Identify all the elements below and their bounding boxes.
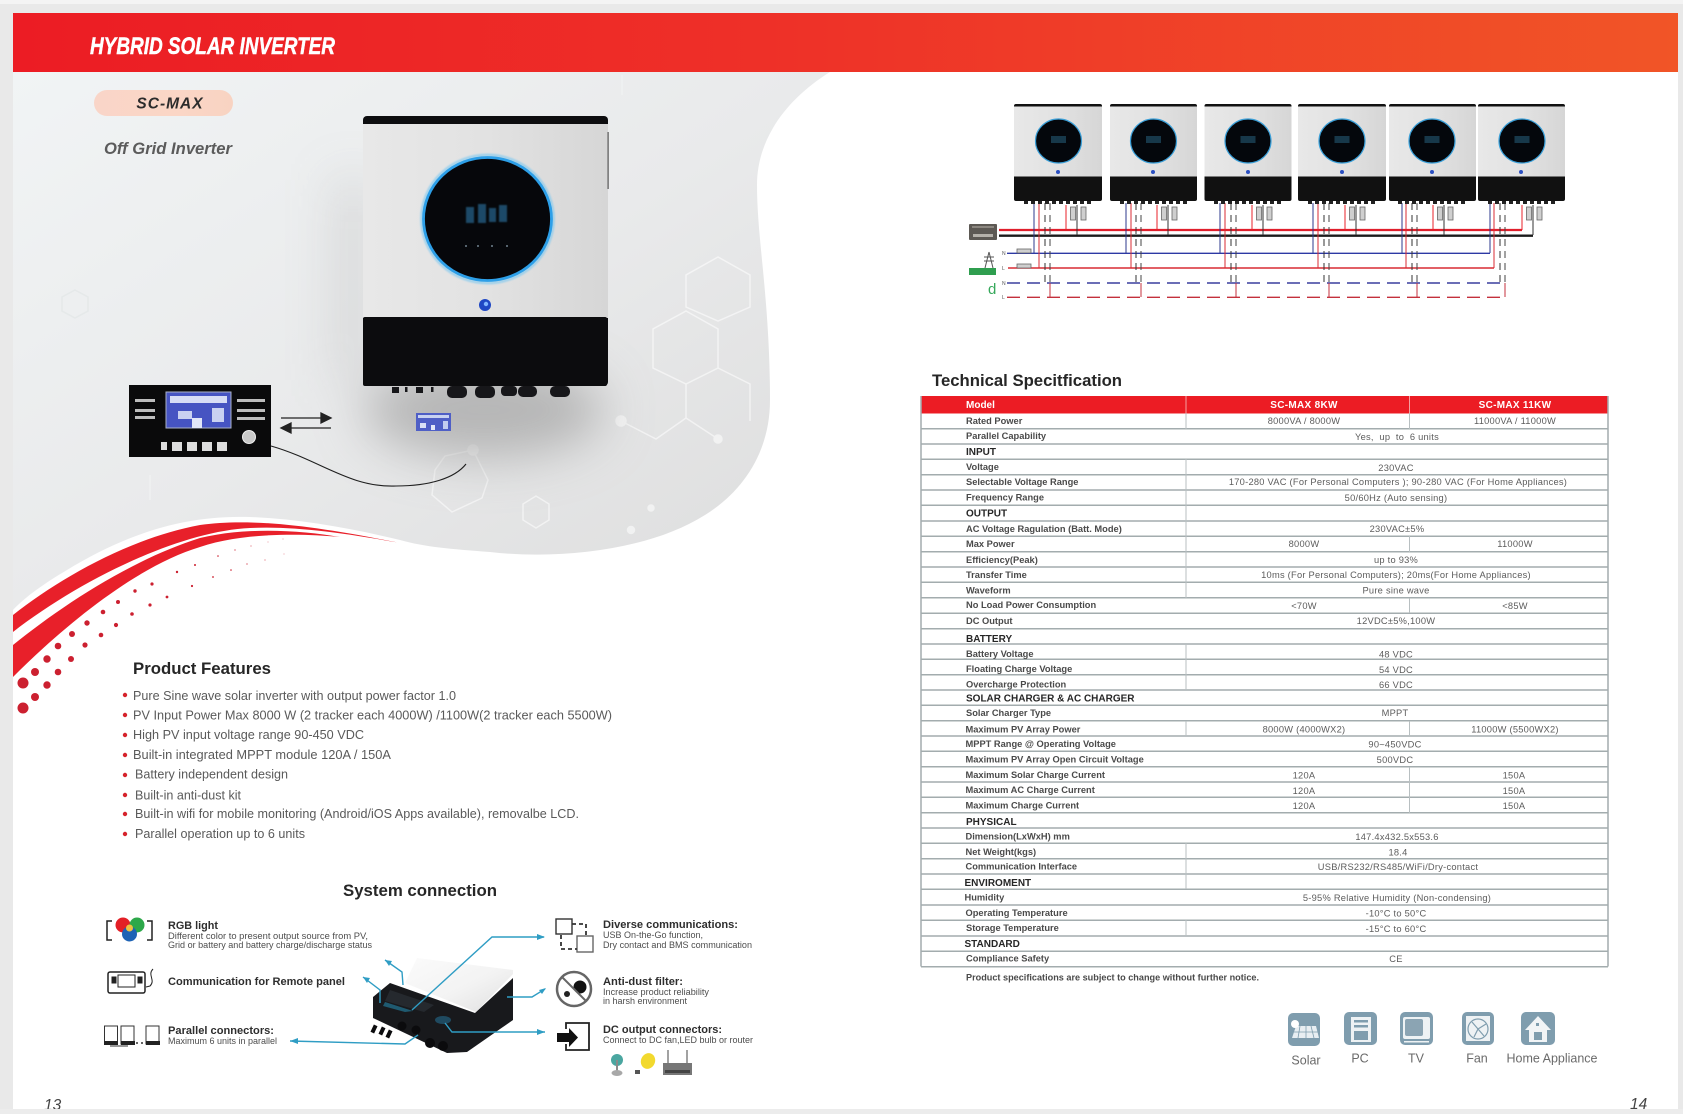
output rows: up to 93% xyxy=(1374,555,1418,565)
icon: DC output xyxy=(557,1023,589,1050)
battery rows: Battery Voltage xyxy=(966,649,1034,659)
application labels: Solar xyxy=(1291,1054,1321,1068)
red dots xyxy=(18,539,284,714)
output rows: 10ms (For Personal Computers); 20ms(For Home Appliances) xyxy=(1261,570,1531,580)
table header: SC-MAX 11KW xyxy=(1479,400,1552,411)
model badge: SC-MAX xyxy=(136,96,204,112)
output rows: <70W xyxy=(1291,601,1317,611)
bottom page edge xyxy=(0,1109,1683,1114)
solar charger rows: Maximum AC Charge Current xyxy=(966,785,1095,795)
battery rows: Floating Charge Voltage xyxy=(966,664,1072,674)
input rows: 230VAC xyxy=(1378,463,1414,473)
red swoosh xyxy=(13,522,400,677)
callout: anti-dust filter: in harsh environment xyxy=(603,996,688,1006)
callout: diverse communications: Diverse communications: xyxy=(603,919,738,931)
icon: solar xyxy=(1288,1013,1320,1046)
environment rows: ENVIROMENT xyxy=(964,878,1031,889)
solar charger rows: MPPT xyxy=(1382,708,1408,718)
callout: remote panel xyxy=(108,969,345,993)
inverter 2 xyxy=(1110,104,1197,202)
bus labels xyxy=(1002,251,1006,301)
input rows: Frequency Range xyxy=(966,492,1044,502)
inverter 1 xyxy=(1014,104,1102,202)
battery rows: 66 VDC xyxy=(1379,680,1413,690)
system diagram inverter xyxy=(370,958,513,1053)
output rows: 230VAC±5% xyxy=(1370,524,1424,534)
application labels: Fan xyxy=(1466,1052,1488,1066)
icon: anti-dust xyxy=(557,972,591,1006)
callout: diverse communications: USB On-the-Go function, xyxy=(603,930,703,940)
callout: RGB light xyxy=(107,918,373,950)
solar charger rows: SOLAR CHARGER & AC CHARGER xyxy=(966,694,1135,704)
breakers xyxy=(1017,207,1542,268)
solar charger rows: MPPT Range @ Operating Voltage xyxy=(966,739,1116,749)
output rows: 8000W xyxy=(1289,539,1319,549)
callout: RGB light: Grid or battery and battery charge/discharge status xyxy=(168,940,373,950)
general rows: Rated Power xyxy=(966,416,1023,426)
callout: DC output connectors: Connect to DC fan,LED bulb or router xyxy=(603,1035,753,1045)
solar charger rows: 150A xyxy=(1503,786,1526,796)
environment rows: 5-95% Relative Humidity (Non-condensing) xyxy=(1303,893,1491,903)
solar charger rows: Solar Charger Type xyxy=(966,708,1051,718)
solar charger rows: 11000W (5500WX2) xyxy=(1471,724,1559,734)
output rows: No Load Power Consumption xyxy=(966,600,1096,610)
environment rows: Humidity xyxy=(964,892,1005,902)
callout: DC output connectors xyxy=(557,1023,753,1076)
bus labels: L xyxy=(1002,295,1005,301)
icon: communications xyxy=(556,919,593,952)
solar charger rows: Maximum Solar Charge Current xyxy=(966,770,1105,780)
icon: fan, bulb, router xyxy=(611,1050,692,1076)
physical rows: 18.4 xyxy=(1388,848,1408,858)
output rows: 12VDC±5%,100W xyxy=(1357,616,1435,626)
feature list: Built-in wifi for mobile monitoring (Android/iOS Apps available), removalbe LCD. xyxy=(135,806,579,821)
general rows: Parallel Capability xyxy=(966,431,1047,441)
application labels: TV xyxy=(1408,1052,1425,1066)
feature list: Parallel operation up to 6 units xyxy=(135,826,305,841)
output rows: Waveform xyxy=(966,586,1011,596)
callout: remote panel: Communication for Remote panel xyxy=(168,976,345,988)
output rows: 11000W xyxy=(1497,539,1533,549)
inverter shadow xyxy=(338,180,604,458)
application labels xyxy=(1291,1052,1598,1068)
output rows: Max Power xyxy=(966,539,1015,549)
bus labels: L xyxy=(1002,266,1005,272)
callout: anti-dust filter xyxy=(557,972,710,1006)
remote LCD panel xyxy=(129,385,271,457)
bus labels: N xyxy=(1002,251,1006,257)
solar charger rows: 120A xyxy=(1293,801,1316,811)
icon: fan xyxy=(1462,1012,1494,1045)
icon: home xyxy=(1521,1012,1555,1045)
icon: remote panel xyxy=(108,969,153,993)
input rows xyxy=(966,447,1567,503)
label d: d xyxy=(988,281,996,298)
general rows xyxy=(966,416,1556,442)
callout: RGB light: Different color to present output source from PV, xyxy=(168,931,368,941)
bus labels: N xyxy=(1002,281,1006,287)
title: HYBRID SOLAR INVERTER xyxy=(90,33,336,60)
icon: PC xyxy=(1344,1012,1377,1045)
output rows: Efficiency(Peak) xyxy=(966,555,1038,565)
inverter 3 xyxy=(1204,104,1292,202)
solar charger rows: 90~450VDC xyxy=(1368,740,1422,750)
environment rows: -10°C to 50°C xyxy=(1366,908,1426,918)
technical specification heading: Technical Specitfication xyxy=(932,372,1122,390)
header banner xyxy=(13,13,1678,72)
feature list: Battery independent design xyxy=(135,766,288,782)
specification table xyxy=(921,396,1608,967)
output rows: DC Output xyxy=(966,616,1012,626)
callout: RGB light: RGB light xyxy=(168,920,218,932)
output rows xyxy=(966,508,1533,626)
input rows: 170-280 VAC (For Personal Computers ); 90-280 VAC (For Home Appliances) xyxy=(1229,477,1567,487)
environment rows: -15°C to 60°C xyxy=(1366,924,1426,934)
output rows: <85W xyxy=(1502,601,1528,611)
solar charger rows: 150A xyxy=(1503,801,1526,811)
callout: diverse communications: Dry contact and BMS communication xyxy=(603,940,752,950)
solar charger rows xyxy=(966,694,1559,811)
solar charger rows: 500VDC xyxy=(1377,755,1413,765)
solar charger rows: Maximum Charge Current xyxy=(966,800,1079,810)
system connection heading: System connection xyxy=(343,882,497,900)
table header: SC-MAX 8KW xyxy=(1270,400,1338,411)
application icons xyxy=(1288,1012,1598,1068)
solar charger rows: 120A xyxy=(1293,770,1316,780)
output rows: OUTPUT xyxy=(966,508,1007,520)
icon: battery xyxy=(969,224,997,240)
callout: DC output connectors: DC output connectors: xyxy=(603,1024,722,1036)
page number 13: 13 xyxy=(44,1097,62,1114)
input rows: 50/60Hz (Auto sensing) xyxy=(1345,493,1447,503)
icon: RGB light xyxy=(107,918,152,942)
feature list: Pure Sine wave solar inverter with output power factor 1.0 xyxy=(133,688,456,703)
input rows: INPUT xyxy=(966,447,996,458)
callout: anti-dust filter: Increase product reliability xyxy=(603,987,710,997)
general rows: 11000VA / 11000W xyxy=(1474,416,1556,426)
feature list: PV Input Power Max 8000 W (2 tracker each 4000W) /1100W(2 tracker each 5500W) xyxy=(133,708,612,722)
blue callout arrows xyxy=(290,934,546,1044)
input rows: Voltage xyxy=(966,462,999,472)
connection cable xyxy=(271,446,466,486)
inverter 6 xyxy=(1478,104,1565,202)
physical rows: Dimension(LxWxH) mm xyxy=(966,832,1070,842)
model badge xyxy=(94,90,233,116)
table footnote: Product specifications are subject to change without further notice. xyxy=(966,972,1259,982)
subtitle: Off Grid Inverter xyxy=(104,139,233,158)
inverter 4 xyxy=(1298,104,1386,202)
battery rows: 54 VDC xyxy=(1379,665,1413,675)
solar charger rows: 8000W (4000WX2) xyxy=(1263,724,1345,734)
physical rows: Net Weight(kgs) xyxy=(966,847,1036,857)
physical rows xyxy=(966,817,1478,872)
small blue display xyxy=(416,413,451,431)
physical rows: Communication Interface xyxy=(966,862,1077,872)
standard rows xyxy=(964,939,1403,964)
inverter 5 xyxy=(1389,104,1476,202)
standard rows: CE xyxy=(1389,954,1403,964)
two-way arrows xyxy=(281,413,331,433)
callout: parallel connectors xyxy=(104,1025,277,1047)
icon: parallel units xyxy=(104,1026,160,1047)
main inverter xyxy=(338,116,609,458)
feature list xyxy=(123,688,612,841)
battery rows: 48 VDC xyxy=(1379,650,1413,660)
hexagon pattern xyxy=(62,75,750,534)
application labels: Home Appliance xyxy=(1506,1052,1598,1066)
icon: TV xyxy=(1400,1012,1433,1045)
battery rows: BATTERY xyxy=(966,634,1012,645)
solar charger rows: Maximum PV Array Power xyxy=(966,724,1081,734)
solar charger rows: Maximum PV Array Open Circuit Voltage xyxy=(966,754,1144,764)
page number 14: 14 xyxy=(1630,1096,1648,1113)
table header: Model xyxy=(966,400,995,411)
solar charger rows: 150A xyxy=(1503,770,1526,780)
output rows: Transfer Time xyxy=(966,570,1027,580)
standard rows: STANDARD xyxy=(964,939,1020,950)
physical rows: USB/RS232/RS485/WiFi/Dry-contact xyxy=(1318,862,1478,872)
table header xyxy=(921,396,1608,414)
solar charger rows: 120A xyxy=(1293,786,1316,796)
standard rows: Compliance Safety xyxy=(966,954,1050,964)
wiring xyxy=(999,203,1533,297)
battery rows: Overcharge Protection xyxy=(966,680,1067,690)
environment rows: Operating Temperature xyxy=(966,908,1068,918)
general rows: 8000VA / 8000W xyxy=(1268,416,1340,426)
callout: parallel connectors: Maximum 6 units in parallel xyxy=(168,1036,277,1046)
icon: grid tower xyxy=(969,252,996,275)
output rows: Pure sine wave xyxy=(1362,586,1430,596)
environment rows: Storage Temperature xyxy=(966,923,1059,933)
callout: parallel connectors: Parallel connectors: xyxy=(168,1025,274,1037)
input rows: Selectable Voltage Range xyxy=(966,477,1078,487)
product features heading: Product Features xyxy=(133,659,271,678)
grey curved background xyxy=(13,72,830,610)
feature list: Built-in anti-dust kit xyxy=(135,788,241,802)
feature list: Built-in integrated MPPT module 120A / 150A xyxy=(133,747,391,762)
application labels: PC xyxy=(1351,1052,1369,1066)
general rows: Yes, up to 6 units xyxy=(1355,432,1439,442)
battery rows xyxy=(966,634,1413,690)
environment rows xyxy=(964,878,1491,934)
feature list: High PV input voltage range 90-450 VDC xyxy=(133,727,364,742)
output rows: AC Voltage Ragulation (Batt. Mode) xyxy=(966,524,1122,534)
parallel system diagram xyxy=(969,104,1565,301)
physical rows: PHYSICAL xyxy=(966,817,1017,828)
callout: anti-dust filter: Anti-dust filter: xyxy=(603,976,683,988)
callout: diverse communications xyxy=(556,919,752,952)
physical rows: 147.4x432.5x553.6 xyxy=(1355,832,1439,842)
